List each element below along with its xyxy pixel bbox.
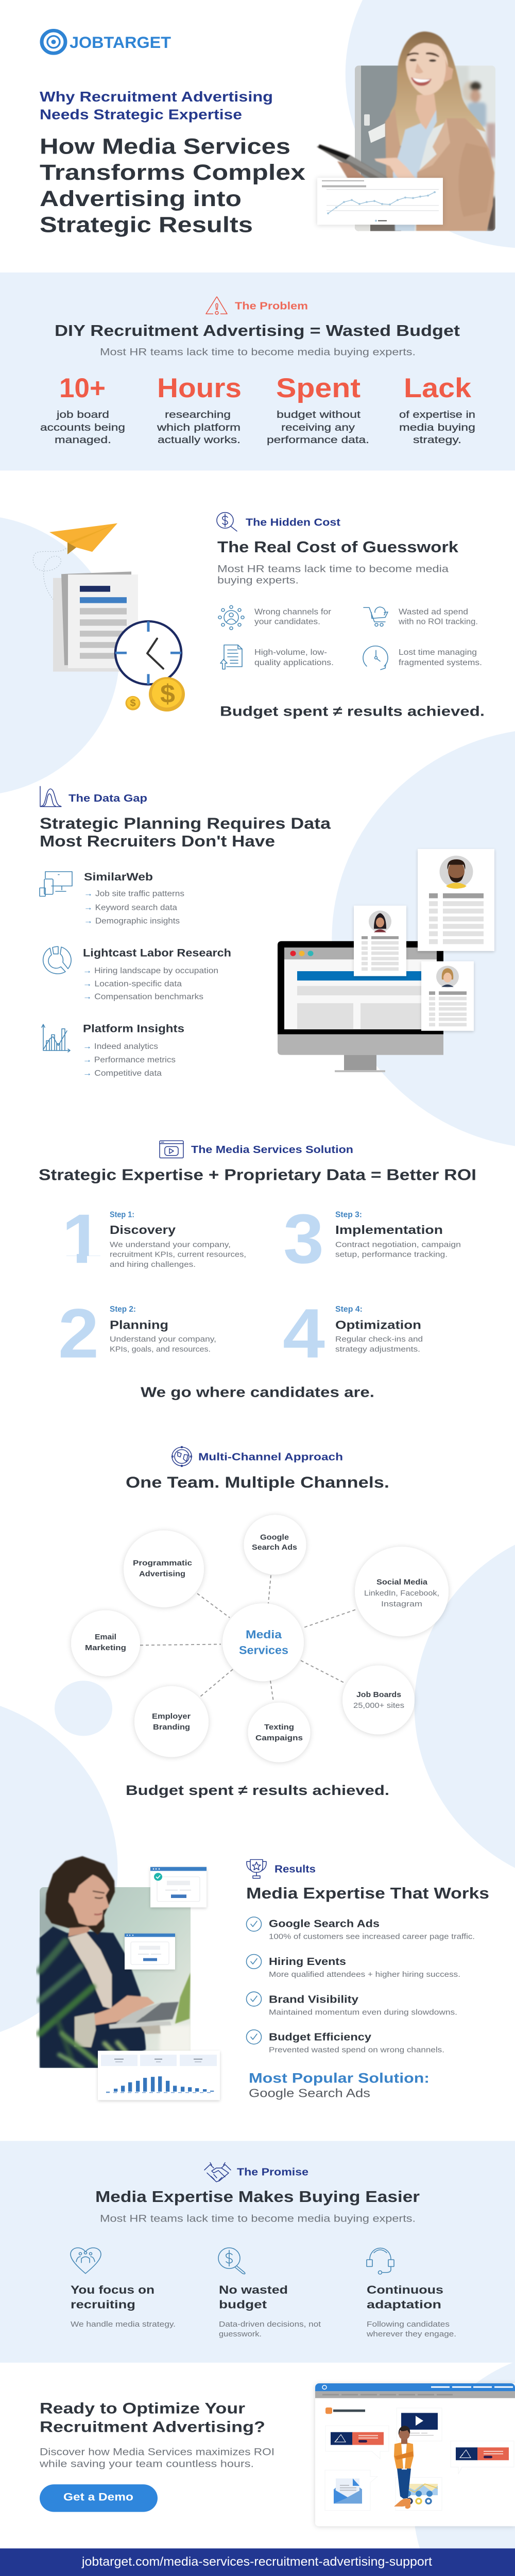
node: Programmatic Advertising: Programmatic xyxy=(133,1559,192,1567)
node: Job Boards: Job Boards xyxy=(356,1690,401,1699)
result: Google Search Ads: Google Search Ads xyxy=(269,1918,380,1929)
video card xyxy=(397,2408,442,2441)
analytics card xyxy=(396,2478,442,2511)
heading: Most Recruiters Don't Have xyxy=(40,833,275,850)
stat: Hours: Hours xyxy=(157,373,242,403)
heading: Media Expertise That Works xyxy=(246,1885,489,1902)
stat: Lack: media buying xyxy=(399,422,475,433)
subheading: Most HR teams lack time to become media buying experts. xyxy=(100,347,416,358)
illustration: paper plane, documents, clock and coins xyxy=(33,523,185,711)
source: SimilarWeb: → Demographic insights xyxy=(84,917,180,925)
body text: while saving your team countless hours. xyxy=(39,2459,254,2470)
step 1: discovery: Step 1: xyxy=(110,1211,134,1219)
source: Lightcast: → Hiring landscape by occupation xyxy=(83,967,218,975)
step 4: optimization: Regular check-ins and xyxy=(335,1336,423,1344)
step 2: planning: Step 2: xyxy=(110,1305,136,1314)
hero subtitle: Needs Strategic Expertise xyxy=(40,107,242,123)
promise: no wasted budget xyxy=(218,2248,321,2338)
panel: call to action xyxy=(39,2383,515,2526)
section label: Results: Results xyxy=(274,1863,316,1875)
item: lost time: fragmented systems. xyxy=(399,658,482,667)
subheading: Most HR teams lack time to become media buying experts. xyxy=(100,2213,416,2224)
node: Texting Campaigns: Texting xyxy=(264,1723,294,1732)
source: Platform Insights: → Competitive data xyxy=(83,1069,162,1078)
result: Budget Efficiency: Budget Efficiency xyxy=(269,2031,372,2043)
step 1: discovery xyxy=(66,1212,245,1268)
heading xyxy=(40,815,331,850)
photo: woman with laptop xyxy=(31,1856,191,2068)
logo: JobTarget xyxy=(42,30,171,53)
stat: Spent: Spent xyxy=(276,373,360,403)
result: Hiring Events: Hiring Events xyxy=(269,1956,346,1968)
step 4: optimization: 4 xyxy=(283,1295,325,1372)
subheading xyxy=(217,564,449,586)
section label: The Promise: The Promise xyxy=(237,2166,308,2178)
panel: multi-channel approach xyxy=(71,1446,449,1798)
section label: Multi-Channel Approach xyxy=(198,1451,343,1463)
illustration: browser window with ads xyxy=(315,2383,515,2526)
panel: results xyxy=(31,1856,489,2100)
source: Platform Insights: → Indeed analytics xyxy=(83,1042,158,1051)
stat: Lack xyxy=(399,373,475,446)
photo: smiling businesswoman with tablet xyxy=(317,31,495,231)
node: Programmatic Advertising: Advertising xyxy=(139,1570,185,1578)
illustration: monitor with candidate profiles xyxy=(278,849,494,1072)
hero title: Transforms Complex xyxy=(40,160,306,185)
icon: warning triangle xyxy=(206,297,227,314)
source: Platform Insights xyxy=(42,1023,184,1078)
step 4: optimization xyxy=(283,1295,423,1372)
callout: most popular solution: Most Popular Solution: xyxy=(249,2070,430,2086)
step 2: planning: Understand your company, xyxy=(110,1336,216,1344)
dashboard bar chart card xyxy=(98,2050,220,2100)
icon: globe xyxy=(172,1446,192,1467)
source: SimilarWeb: SimilarWeb xyxy=(84,871,153,883)
promise: no wasted budget: No wasted xyxy=(219,2283,288,2296)
step 1: discovery: We understand your company, xyxy=(110,1241,231,1249)
stat: Lack: of expertise in xyxy=(399,409,475,420)
heading: The Real Cost of Guesswork xyxy=(217,538,459,556)
heading: One Team. Multiple Channels. xyxy=(126,1473,389,1491)
stat: 10+ xyxy=(40,373,125,446)
panel: the media services solution xyxy=(39,1141,476,1400)
item: wasted ad spend xyxy=(364,607,478,626)
node: Social Media: Social Media xyxy=(376,1578,428,1587)
heading: Strategic Expertise + Proprietary Data = Better ROI xyxy=(39,1166,476,1183)
stat: 10+: managed. xyxy=(55,434,111,446)
icon: handshake xyxy=(204,2163,231,2182)
profile card: woman xyxy=(354,906,406,976)
step 4: optimization: Optimization xyxy=(335,1318,421,1331)
step 4: optimization: Step 4: xyxy=(335,1305,363,1314)
result: Google Search Ads: 100% of customers see increased career page traffic. xyxy=(269,1933,475,1941)
step 3: implementation: Contract negotiation, campaign xyxy=(335,1241,461,1249)
item: wasted ad spend: with no ROI tracking. xyxy=(398,618,478,626)
source: Lightcast xyxy=(43,946,231,1001)
source: Platform Insights: → Performance metrics xyxy=(83,1056,176,1064)
item: wrong channels: Wrong channels for xyxy=(254,608,331,617)
result: Brand Visibility: Brand Visibility xyxy=(269,1994,359,2006)
node: Employer Branding: Branding xyxy=(153,1723,190,1732)
section label: The Problem: The Problem xyxy=(235,300,308,312)
heading: Strategic Planning Requires Data xyxy=(40,815,331,832)
stat: 10+: job board xyxy=(56,409,109,420)
hero title: How Media Services xyxy=(40,134,290,159)
profile card: large xyxy=(418,849,494,951)
result: Brand Visibility xyxy=(246,1992,457,2017)
button: get a demo: Get a Demo xyxy=(63,2491,133,2503)
section label: The Media Services Solution xyxy=(191,1144,353,1156)
node: Email Marketing xyxy=(71,1610,140,1676)
node: Google Search Ads: Search Ads xyxy=(252,1543,297,1552)
heading: Ready to Optimize Your xyxy=(40,2400,245,2417)
hero title xyxy=(40,134,306,237)
floating window: form xyxy=(125,1934,175,1970)
node: Job Boards xyxy=(342,1666,415,1734)
promise: continuous adaptation xyxy=(366,2248,456,2338)
step 3: implementation: 3 xyxy=(283,1200,324,1278)
panel: footer url bar xyxy=(0,2548,515,2576)
step 3: implementation: Implementation xyxy=(335,1223,443,1236)
item: wrong channels: your candidates. xyxy=(254,618,320,626)
hero title: Strategic Results xyxy=(40,212,253,237)
stat: 10+: accounts being xyxy=(40,422,125,433)
section label: The Hidden Cost: The Hidden Cost xyxy=(246,517,340,528)
button: get a demo xyxy=(40,2484,158,2512)
step 1: discovery: recruitment KPIs, current resources, xyxy=(110,1251,246,1259)
stat: Hours: actually works. xyxy=(158,434,241,446)
stat: Spent: budget without xyxy=(277,409,361,420)
callout: Budget spent ≠ results achieved. xyxy=(220,703,485,719)
icon: trophy xyxy=(247,1859,266,1878)
step 2: planning: 2 xyxy=(58,1295,99,1372)
item: low quality applications xyxy=(220,645,334,669)
result: Budget Efficiency: Prevented wasted spend on wrong channels. xyxy=(269,2046,444,2054)
result: Google Search Ads xyxy=(246,1917,475,1941)
node: Email Marketing: Email xyxy=(95,1633,116,1641)
node: Email Marketing: Marketing xyxy=(85,1643,126,1652)
stat: Spent: performance data. xyxy=(267,434,369,446)
callout: We go where candidates are. xyxy=(141,1384,374,1400)
stat: Hours: which platform xyxy=(157,422,241,433)
promise: continuous adaptation: wherever they engage. xyxy=(366,2330,456,2338)
step 3: implementation: Step 3: xyxy=(335,1211,362,1219)
step 1: discovery: Discovery xyxy=(110,1223,176,1236)
mail card xyxy=(325,2470,377,2511)
node: Job Boards: 25,000+ sites xyxy=(353,1701,404,1710)
subheading: Most HR teams lack time to become media xyxy=(217,564,449,574)
result: Hiring Events xyxy=(246,1955,460,1979)
step 2: planning: Planning xyxy=(110,1318,168,1331)
step 1: discovery: and hiring challenges. xyxy=(110,1261,196,1269)
node: Media Services hub: Services xyxy=(239,1644,288,1656)
result: Hiring Events: More qualified attendees + higher hiring success. xyxy=(269,1971,460,1979)
promise: continuous adaptation: Continuous xyxy=(367,2283,443,2296)
panel: the problem xyxy=(0,273,515,470)
source: SimilarWeb: → Keyword search data xyxy=(84,904,177,912)
ad card: right xyxy=(451,2441,514,2474)
floating window: confirmation xyxy=(150,1867,207,1907)
hero line chart card xyxy=(317,178,443,225)
stat: Lack: strategy. xyxy=(413,434,461,446)
step 2: planning: KPIs, goals, and resources. xyxy=(110,1346,211,1353)
callout: Budget spent ≠ results achieved. xyxy=(126,1783,389,1798)
step 1: discovery: 1 xyxy=(62,1200,102,1278)
panel: the promise xyxy=(0,2141,515,2363)
result: Budget Efficiency xyxy=(246,2030,444,2054)
figure: woman with crossed arms xyxy=(394,2426,414,2509)
heading: Media Expertise Makes Buying Easier xyxy=(95,2188,420,2206)
promise: no wasted budget: budget xyxy=(219,2298,267,2311)
panel: the data gap xyxy=(40,786,494,1078)
chart: channel hub diagram xyxy=(71,1515,449,1762)
node: Social Media: LinkedIn, Facebook, xyxy=(364,1589,439,1598)
item: low quality applications: High-volume, low- xyxy=(254,648,327,657)
stat: Spent: receiving any xyxy=(281,422,355,433)
heading: Recruitment Advertising? xyxy=(40,2419,265,2436)
panel: footer url bar: jobtarget.com/media-services-recruitment-advertising-support xyxy=(81,2555,432,2569)
stat: Lack: Lack xyxy=(404,373,471,403)
node: Employer Branding xyxy=(134,1686,209,1757)
body text: Discover how Media Services maximizes ROI xyxy=(40,2447,274,2458)
heading: DIY Recruitment Advertising = Wasted Budget xyxy=(55,322,460,340)
callout: most popular solution: Google Search Ads xyxy=(249,2087,370,2099)
ad card: left xyxy=(325,2426,389,2459)
promise: you focus on recruiting: You focus on xyxy=(71,2283,154,2296)
promise: no wasted budget: guesswork. xyxy=(219,2330,262,2338)
heading xyxy=(40,2400,265,2436)
node: Employer Branding: Employer xyxy=(152,1712,191,1721)
source: Lightcast: Lightcast Labor Research xyxy=(83,947,231,959)
node: Google Search Ads: Google xyxy=(260,1533,289,1542)
item: low quality applications: quality applications. xyxy=(254,658,334,667)
node: Texting Campaigns: Campaigns xyxy=(255,1734,303,1742)
item: lost time xyxy=(363,646,482,670)
source: Platform Insights: Platform Insights xyxy=(83,1023,184,1035)
promise: continuous adaptation: Following candidates xyxy=(367,2320,450,2329)
promise: you focus on recruiting: We handle media strategy. xyxy=(71,2320,176,2329)
node: Google Search Ads xyxy=(244,1515,306,1574)
hero subtitle xyxy=(40,89,273,123)
promise: continuous adaptation: adaptation xyxy=(367,2298,441,2311)
promise: you focus on recruiting xyxy=(71,2248,176,2329)
hero subtitle: Why Recruitment Advertising xyxy=(40,89,273,105)
icon: video window xyxy=(160,1141,183,1158)
source: Lightcast: → Compensation benchmarks xyxy=(83,993,203,1001)
source: SimilarWeb: → Job site traffic patterns xyxy=(84,890,184,899)
item: lost time: Lost time managing xyxy=(399,648,477,657)
body text xyxy=(39,2447,274,2470)
node: Texting Campaigns xyxy=(248,1703,310,1762)
node: Media Services hub xyxy=(222,1603,304,1681)
step 3: implementation: setup, performance tracking. xyxy=(335,1251,448,1259)
callout: most popular solution xyxy=(249,2070,430,2099)
node: Social Media: Instagram xyxy=(381,1600,422,1608)
result: Brand Visibility: Maintained momentum even during slowdowns. xyxy=(269,2009,457,2017)
icon: dollar magnifier xyxy=(217,513,237,531)
step 4: optimization: strategy adjustments. xyxy=(335,1346,420,1353)
stat: Hours xyxy=(157,373,242,446)
source: SimilarWeb xyxy=(40,871,184,925)
promise: you focus on recruiting: recruiting xyxy=(71,2298,135,2311)
stat: Spent xyxy=(267,373,369,446)
node: Social Media xyxy=(355,1547,449,1636)
illustration: paper plane, documents, clock and coins: $ xyxy=(160,680,175,708)
icon: bell curves xyxy=(40,786,61,807)
hero title: Advertising into xyxy=(40,187,242,211)
stat: 10+: 10+ xyxy=(59,373,106,403)
item: wasted ad spend: Wasted ad spend xyxy=(399,608,468,617)
promise: no wasted budget: Data-driven decisions, not xyxy=(219,2320,321,2329)
source: Lightcast: → Location-specific data xyxy=(83,980,182,989)
subheading: buying experts. xyxy=(217,575,299,586)
profile card: blond xyxy=(421,961,474,1031)
logo: JobTarget: JOBTARGET xyxy=(70,33,171,52)
stat: Hours: researching xyxy=(165,409,231,420)
illustration: paper plane, documents, clock and coins: $ xyxy=(130,698,136,708)
step 3: implementation xyxy=(283,1200,461,1278)
step 2: planning xyxy=(58,1295,216,1372)
item: wrong channels xyxy=(218,605,331,630)
section label: The Data Gap: The Data Gap xyxy=(68,792,147,804)
panel: the hidden cost xyxy=(33,513,485,719)
node: Programmatic Advertising xyxy=(124,1531,204,1607)
node: Media Services hub: Media xyxy=(246,1628,282,1641)
